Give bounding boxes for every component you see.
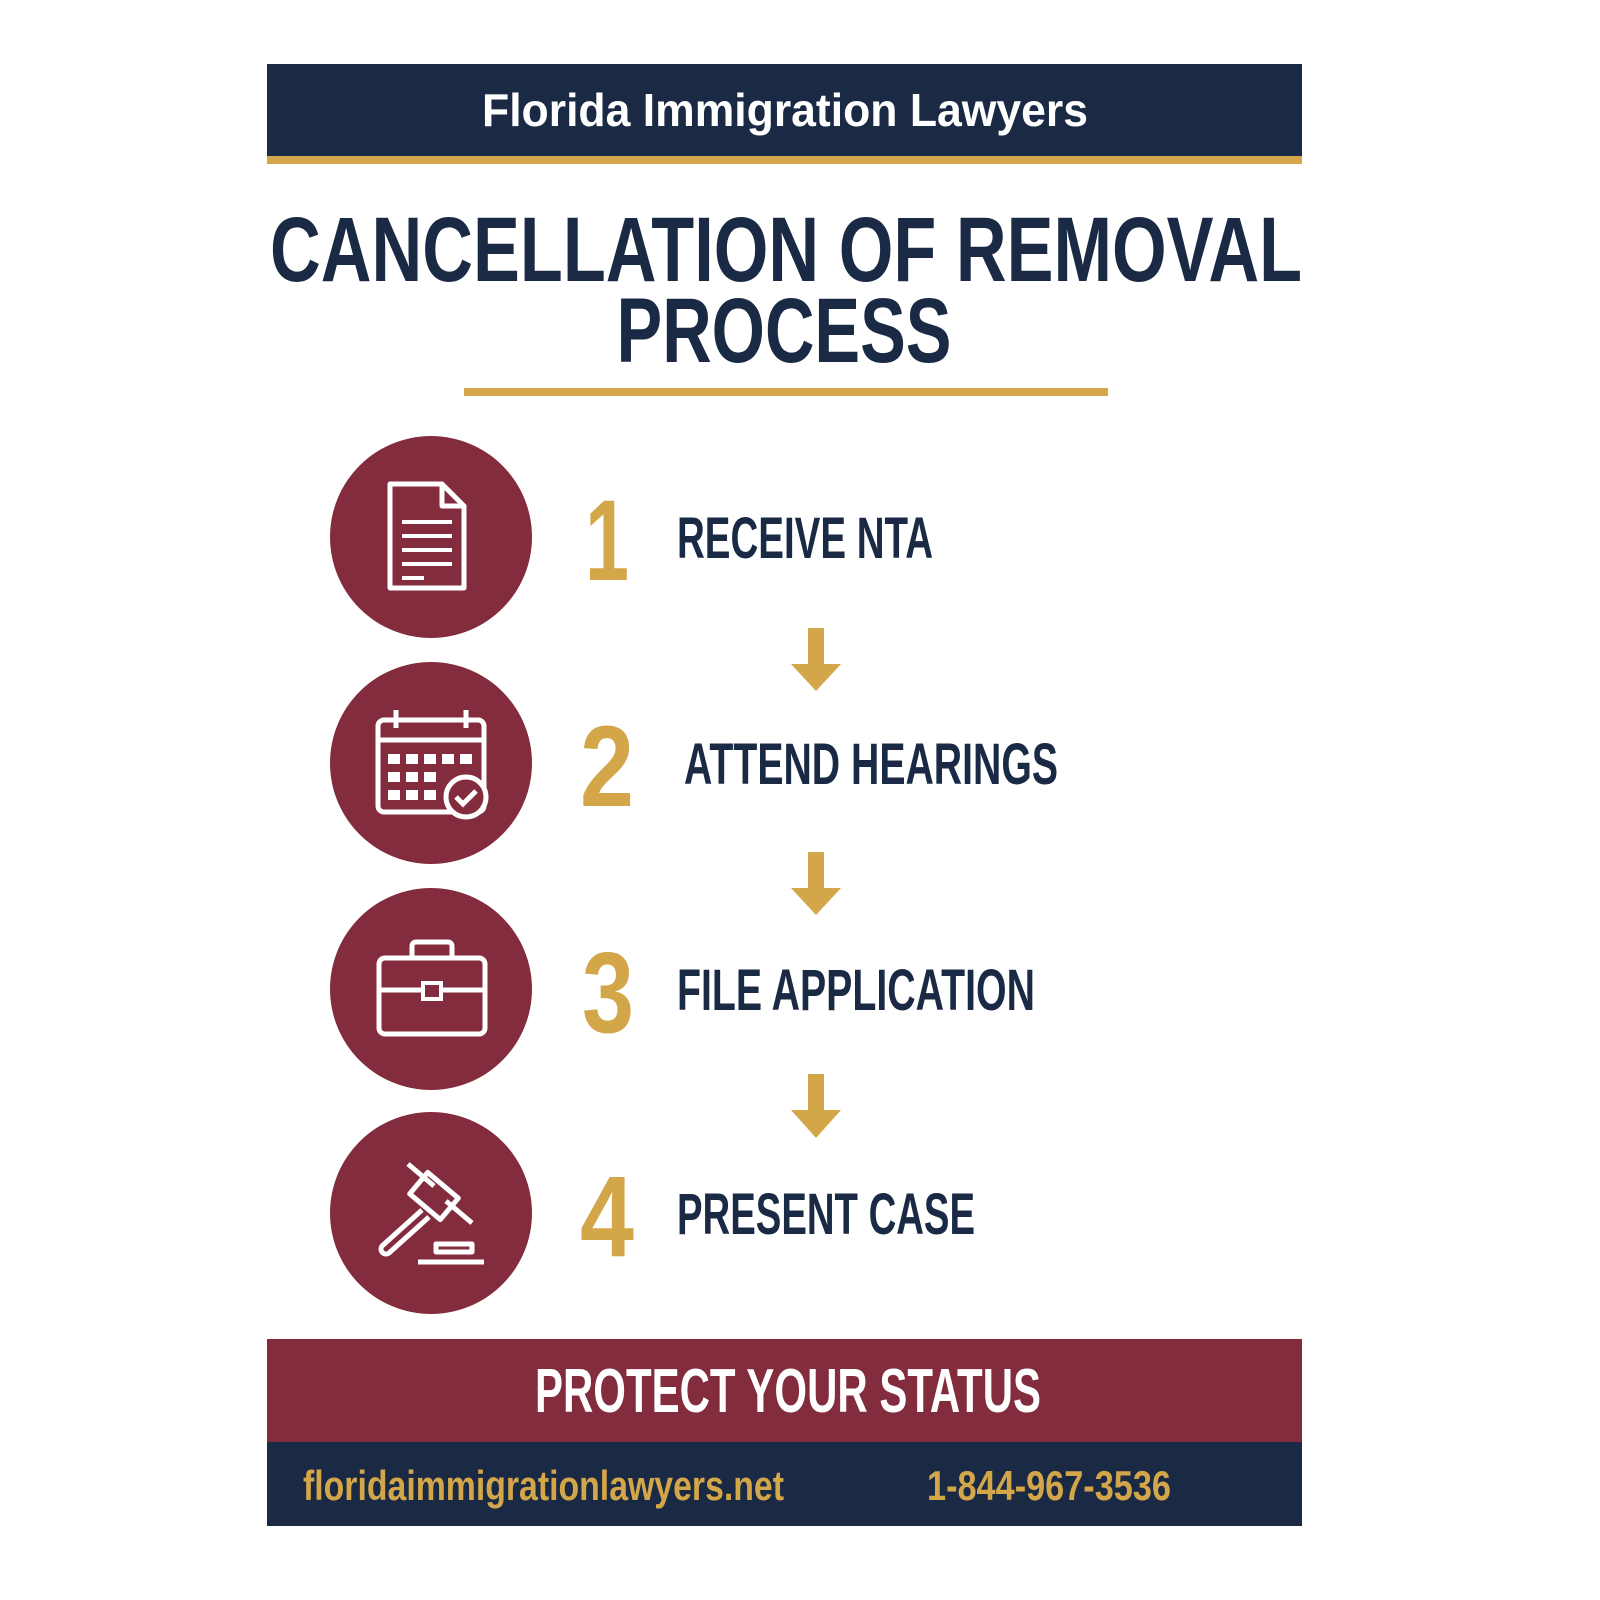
step 2: 2: [580, 703, 634, 831]
footer: call to action: PROTECT YOUR STATUS: [535, 1357, 1041, 1426]
icon: calendar: [330, 662, 532, 864]
title: PROCESS: [616, 280, 952, 382]
icon: briefcase: [330, 888, 532, 1090]
icon: gavel: [330, 1112, 532, 1314]
step 4: 4: [580, 1153, 634, 1281]
step 4: PRESENT CASE: [677, 1182, 975, 1247]
step 4: [330, 1112, 975, 1314]
step 1: [330, 436, 933, 638]
step 1: 1: [585, 477, 629, 605]
footer: contact: floridaimmigrationlawyers.net: [303, 1462, 784, 1509]
title underline: [464, 388, 1108, 396]
header banner: Florida Immigration Lawyers: [482, 84, 1088, 136]
arrow 2: [791, 852, 841, 915]
footer: contact: [267, 1442, 1302, 1526]
footer: contact: 1-844-967-3536: [927, 1462, 1171, 1509]
icon: document: [330, 436, 532, 638]
step 3: 3: [582, 929, 634, 1057]
step 3: FILE APPLICATION: [677, 958, 1035, 1023]
title: [270, 199, 1302, 382]
step 2: [330, 662, 1058, 864]
title: CANCELLATION OF REMOVAL: [270, 199, 1302, 301]
arrow 3: [791, 1074, 841, 1138]
footer: call to action: [267, 1339, 1302, 1442]
step 1: RECEIVE NTA: [677, 506, 933, 571]
step 2: ATTEND HEARINGS: [684, 732, 1058, 797]
header banner: [267, 64, 1302, 164]
arrow 1: [791, 628, 841, 691]
step 3: [330, 888, 1035, 1090]
